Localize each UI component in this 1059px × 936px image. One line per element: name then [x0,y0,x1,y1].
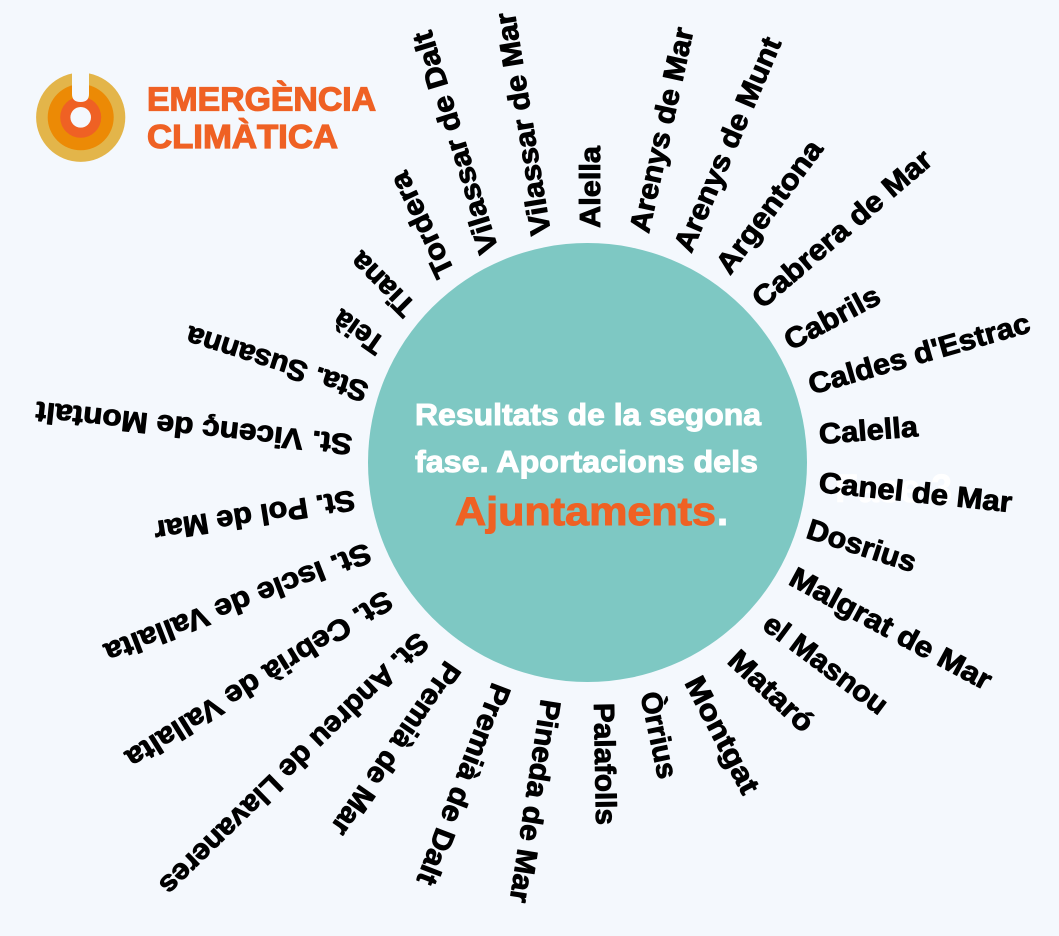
label: Tiana: Tiana [344,244,422,323]
label: Argentona: Argentona [710,133,830,280]
title line 2: fase. Aportacions dels [415,444,758,479]
label: Premià de Dalt: Premià de Dalt [410,679,516,890]
label: Canel de Mar: Canel de Mar [817,467,1014,519]
label: St. Iscle de Vallalta: St. Iscle de Vallalta [99,536,375,669]
icon: logo target [36,70,125,162]
label: Pineda de Mar: Pineda de Mar [503,697,566,905]
label: Cabrera de Mar: Cabrera de Mar [746,144,939,315]
label: Tordera: Tordera [383,166,461,282]
central title [415,397,762,534]
label: Calella: Calella [818,411,920,451]
label: St. Pol de Mar: St. Pol de Mar [152,483,357,547]
label: Teià: Teià [327,302,391,360]
logo wordmark line 2: CLIMÀTICA [147,118,338,155]
logo wordmark line 1: EMERGÈNCIA [147,81,376,118]
label: Cabrils: Cabrils [779,280,886,357]
label: Malgrat de Mar: Malgrat de Mar [784,562,997,697]
title highlight: Ajuntaments [455,490,716,534]
label: St. Andreu de Llavaneres: St. Andreu de Llavaneres [153,626,434,901]
label: Òrrius: Òrrius [633,688,685,782]
label: Vilassar de Dalt: Vilassar de Dalt [407,27,505,257]
label: Sta. Susanna: Sta. Susanna [182,319,372,407]
label: St. Vicenç de Montalt: St. Vicenç de Montalt [34,395,354,460]
label: Mataró: Mataró [721,644,820,739]
central circle [368,243,807,682]
label: Alella: Alella [575,145,607,228]
faint hidden label: Fase 3: Fase 3 [835,467,952,511]
title full stop: . [717,490,728,534]
label: Arenys de Mar: Arenys de Mar [624,25,700,236]
label: Vilassar de Mar: Vilassar de Mar [490,10,558,237]
label: Montgat: Montgat [678,671,765,800]
label: Caldes d'Estrac: Caldes d'Estrac [805,307,1034,401]
label: Premià de Mar: Premià de Mar [324,655,466,841]
label: Arenys de Munt: Arenys de Munt [668,32,788,257]
label: St. Cebrià de Vallalta: St. Cebrià de Vallalta [119,584,398,774]
label: el Masnou: el Masnou [757,608,894,721]
title line 1: Resultats de la segona [415,397,762,432]
label: Palafolls: Palafolls [587,703,621,825]
label: Dosrius: Dosrius [803,514,920,579]
logo: Emergència Climàtica [36,70,376,162]
